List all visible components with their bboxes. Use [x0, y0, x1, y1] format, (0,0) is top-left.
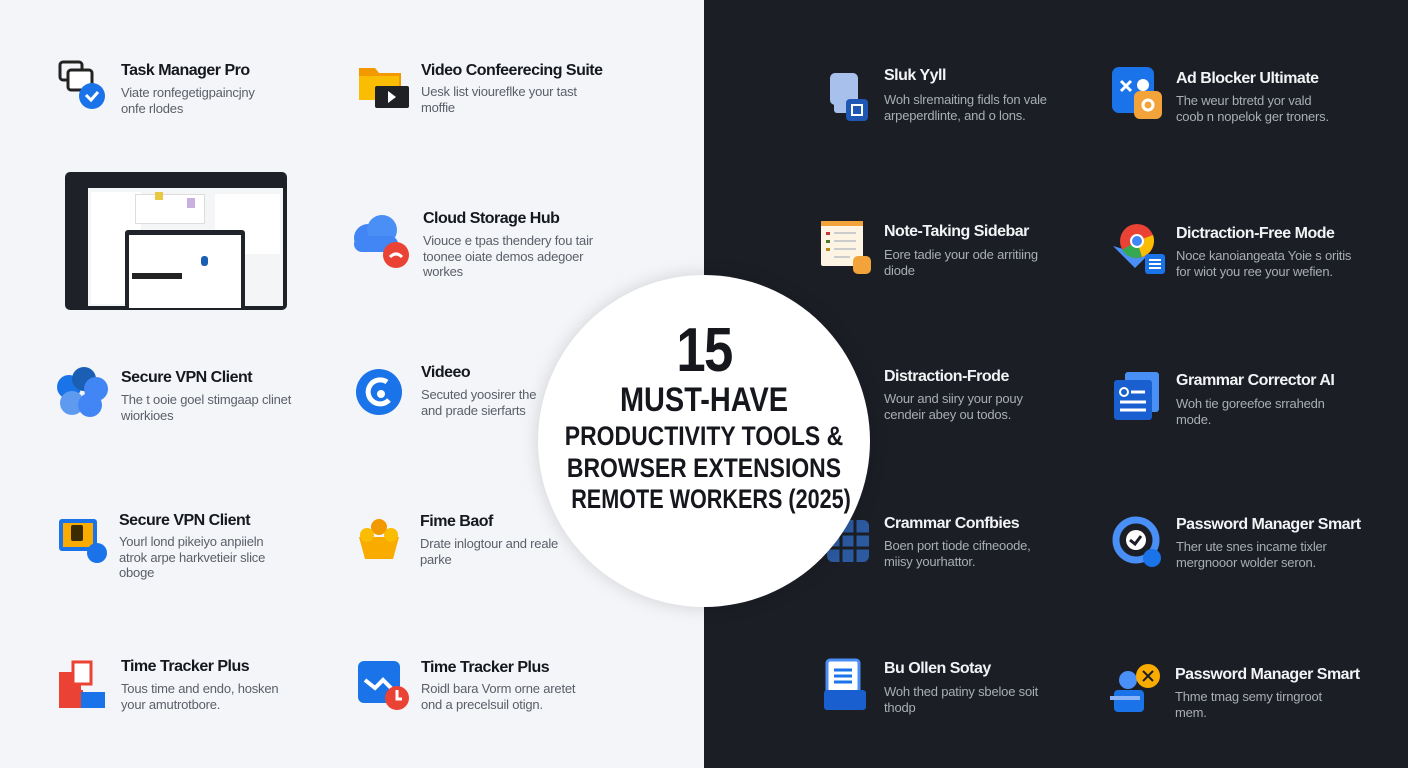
item: Cloud Storage Hub — [354, 210, 593, 279]
item: Secure VPN Client: wiorkioes — [121, 408, 173, 422]
title circle: PRODUCTIVITY TOOLS & — [565, 421, 843, 451]
item: Distraction-Frode: cendeir abey ou todos. — [884, 406, 1011, 422]
item: Cloud Storage Hub: Cloud Storage Hub — [423, 210, 559, 227]
icon: ring — [1112, 516, 1161, 567]
item: Secure VPN Client 2: Secure VPN Client — [119, 512, 250, 529]
item: Fime Baof: Drate inlogtour and reale — [420, 536, 558, 551]
item: Task Manager Pro: Task Manager Pro — [121, 62, 250, 79]
item: Secure VPN Client — [57, 367, 292, 422]
icon: ad blocker — [1112, 67, 1162, 119]
item: Fime Baof: Fime Baof — [420, 513, 493, 530]
item: Grammar Corrector AI: Grammar Corrector AI — [1176, 372, 1334, 389]
item: Time Tracker Plus 2: ond a precelsuil otign. — [421, 696, 543, 712]
item: Videeo — [356, 364, 536, 418]
item: Sluk Yyll: arpeperdlinte, and o lons. — [884, 108, 1026, 122]
item: Time Tracker Plus 2: Time Tracker Plus — [421, 659, 549, 676]
icon: chart badge — [358, 661, 409, 710]
icon: grid — [827, 520, 869, 562]
item: Bu Ollen Sotay: thodp — [884, 700, 916, 714]
icon: orange box — [359, 519, 399, 559]
icon: blue circle — [356, 369, 402, 415]
item: Secure VPN Client: The t ooie goel stimgaap clinet — [121, 392, 291, 407]
item: Ad Blocker Ultimate — [1112, 67, 1329, 124]
item: Cloud Storage Hub: workes — [423, 264, 463, 279]
icon: task manager — [58, 60, 105, 109]
item: Video Conferencing Suite: Uesk list vioureflke your tast — [421, 84, 577, 99]
item: Sluk Yyll — [830, 67, 1047, 122]
item: Password Manager Smart: Password Manager Smart — [1176, 516, 1361, 533]
item: Cloud Storage Hub: Viouce e tpas thendery fou tair — [423, 233, 593, 248]
item: Password Manager Smart: Ther ute snes incame tixler — [1176, 539, 1327, 554]
item: Crammar Confbies: Crammar Confbies — [884, 515, 1019, 532]
item: Ad Blocker Ultimate: coob n nopelok ger troners. — [1176, 108, 1329, 124]
item: Password Manager Smart: mergnooor wolder seron. — [1176, 554, 1316, 570]
item: Dictraction-Free Mode — [1113, 224, 1351, 278]
item: Ad Blocker Ultimate: Ad Blocker Ultimate — [1176, 70, 1319, 87]
item: Grammar Corrector AI: mode. — [1176, 412, 1211, 426]
item: Secure VPN Client 2: atrok arpe harkvetieir slice — [119, 550, 265, 564]
icon: document stack — [824, 658, 866, 710]
item: Videeo: and prade sierfarts — [421, 402, 526, 418]
item: Task Manager Pro — [58, 60, 255, 116]
icon: lock window — [59, 519, 107, 563]
item: Distraction-Frode: Wour and siiry your pouy — [884, 391, 1023, 406]
item: Bu Ollen Sotay — [824, 658, 1038, 714]
icon: document — [1114, 372, 1159, 420]
icon: puzzle — [830, 73, 868, 121]
item: Sluk Yyll: Sluk Yyll — [884, 67, 946, 84]
item: Password Manager Smart 2 — [1110, 664, 1360, 720]
item: Time Tracker Plus: Time Tracker Plus — [121, 658, 249, 675]
item: Sluk Yyll: Woh slremaiting fidls fon vale — [884, 92, 1047, 107]
item: Time Tracker Plus — [59, 658, 278, 712]
item: Password Manager Smart — [1112, 516, 1361, 570]
icon: notes — [821, 221, 871, 274]
icon: chrome — [1113, 224, 1165, 274]
item: Ad Blocker Ultimate: The weur btretd yor vald — [1176, 93, 1311, 108]
item: Note-Taking Sidebar: Eore tadie your ode arritiing — [884, 247, 1038, 262]
item: Password Manager Smart 2: Password Manager Smart — [1175, 666, 1360, 683]
item: Task Manager Pro: Viate ronfegetigpaincjny — [121, 85, 255, 100]
item: Note-Taking Sidebar: Note-Taking Sidebar — [884, 223, 1029, 240]
item: Task Manager Pro: onfe rlodes — [121, 100, 183, 116]
item: Grammar Corrector AI — [1114, 372, 1334, 426]
title circle: MUST-HAVE — [620, 381, 788, 419]
item: Bu Ollen Sotay: Bu Ollen Sotay — [884, 660, 991, 677]
icon: cloud — [354, 215, 409, 268]
item: Password Manager Smart 2: Thme tmag semy tirngroot — [1175, 689, 1322, 704]
item: Crammar Confbies: miisy yourhattor. — [884, 554, 975, 568]
item: Dictraction-Free Mode: Dictraction-Free Mode — [1176, 225, 1334, 242]
item: Dictraction-Free Mode: Noce kanoiangeata Yoie s oritis — [1176, 248, 1351, 263]
item: Fime Baof: parke — [420, 552, 452, 566]
item: Video Conferencing Suite: Video Confeerecing Suite — [421, 62, 603, 79]
icon: red blue blocks — [59, 660, 105, 708]
item: Time Tracker Plus: Tous time and endo, hosken — [121, 681, 278, 696]
item: Cloud Storage Hub: toonee oiate demos adegoer — [423, 248, 583, 264]
item: Time Tracker Plus 2 — [358, 659, 576, 712]
item: Time Tracker Plus: your amutrotbore. — [121, 696, 220, 712]
item: Secure VPN Client: Secure VPN Client — [121, 369, 252, 386]
item: Password Manager Smart 2: mem. — [1175, 704, 1207, 720]
title circle: BROWSER EXTENSIONS — [567, 453, 841, 483]
item: Videeo: Secuted yoosirer the — [421, 387, 536, 402]
title circle — [538, 275, 870, 607]
item: Video Conferencing Suite: moffie — [421, 100, 455, 114]
icon: person key — [1110, 664, 1160, 712]
item: Videeo: Videeo — [421, 364, 470, 381]
item: Distraction-Frode — [884, 368, 1023, 422]
item: Time Tracker Plus 2: Roidl bara Vorm orne aretet — [421, 681, 575, 696]
title circle: REMOTE WORKERS (2025) — [571, 484, 851, 514]
title circle: 15 — [676, 316, 732, 385]
item: Note-Taking Sidebar — [821, 221, 1038, 278]
icon: video folder — [359, 68, 409, 108]
item: Crammar Confbies — [827, 515, 1031, 568]
item: Dictraction-Free Mode: for wiot you ree your wefien. — [1176, 264, 1333, 278]
item: Bu Ollen Sotay: Woh thed patiny sbeloe soit — [884, 684, 1038, 699]
item: Distraction-Frode: Distraction-Frode — [884, 368, 1009, 385]
item: Video Conferencing Suite — [359, 62, 603, 114]
item: Crammar Confbies: Boen port tiode cifneoode, — [884, 538, 1031, 553]
item: Fime Baof — [359, 513, 558, 566]
icon: blue bubbles — [57, 367, 108, 417]
item: Secure VPN Client 2: oboge — [119, 565, 154, 580]
screenshot: dashboard — [65, 172, 287, 310]
item: Note-Taking Sidebar: diode — [884, 262, 915, 278]
item: Secure VPN Client 2: Yourl lond pikeiyo anpiieln — [119, 534, 263, 549]
item: Secure VPN Client 2 — [59, 512, 265, 580]
item: Grammar Corrector AI: Woh tie goreefoe srrahedn — [1176, 396, 1325, 411]
